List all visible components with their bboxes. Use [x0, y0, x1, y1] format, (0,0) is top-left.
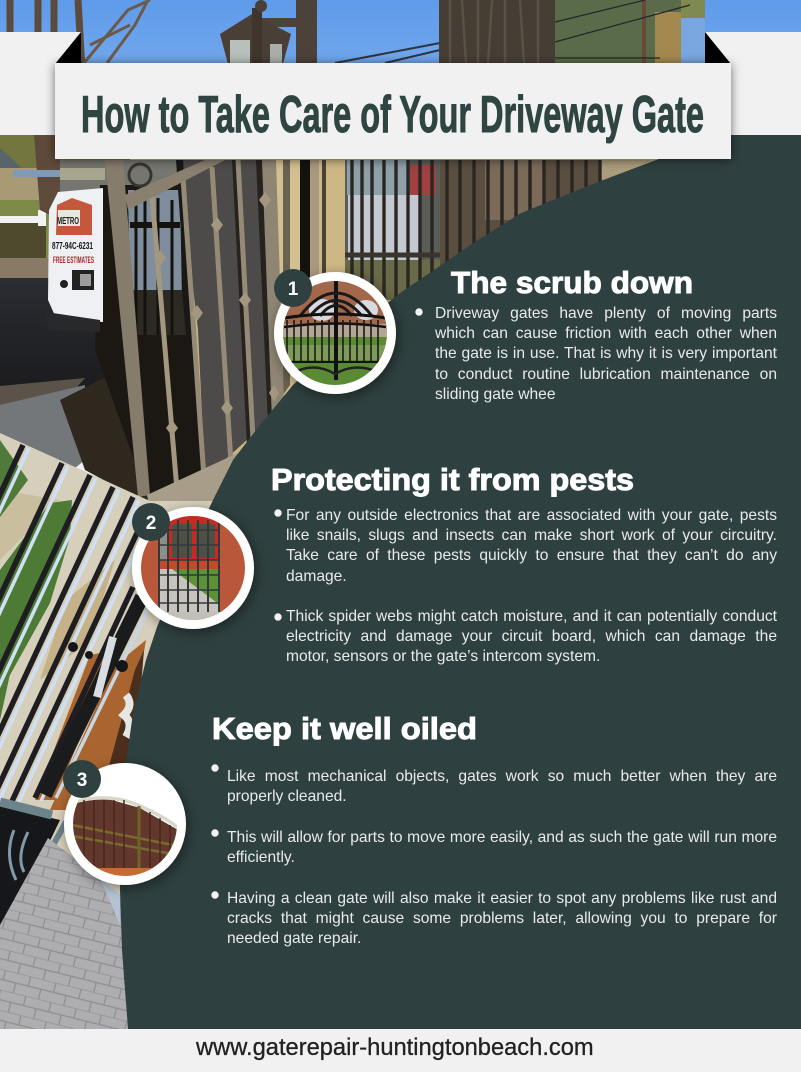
van	[46, 188, 103, 332]
ribbon ends	[0, 32, 801, 135]
text: scrub down paragraph: the gate is in use. That is why it is very important	[435, 345, 777, 362]
pickets	[352, 160, 600, 300]
title banner	[55, 63, 731, 159]
text: oil paragraph two: efficiently.	[227, 849, 295, 866]
tree trunk	[439, 0, 555, 70]
gate lattice	[0, 806, 60, 925]
gate bars	[0, 444, 140, 802]
text: scrub down paragraph: sliding gate whee	[435, 386, 556, 403]
icon: street lamp	[220, 0, 317, 64]
text: oil paragraph three: Having a clean gate will also make it easier to spot any problems like rust and	[227, 890, 777, 907]
main post and brace	[105, 160, 150, 497]
van: FREE ESTIMATES	[53, 255, 94, 265]
text: oil paragraph three: needed gate repair.	[227, 930, 361, 947]
footer website address: www.gaterepair-huntingtonbeach.com	[196, 1035, 594, 1061]
wrought bars	[130, 222, 180, 228]
number badge 1: 1	[288, 279, 299, 300]
road and sidewalk	[0, 278, 120, 388]
photo: fence and work van	[0, 135, 801, 510]
number badge 2	[132, 503, 170, 541]
heading: protecting it from pests: Protecting it from pests	[271, 462, 634, 497]
green hedge	[0, 500, 72, 693]
text: oil paragraph one	[227, 768, 777, 805]
text: pests paragraph two: Thick spider webs might catch moisture, and it can potentially conduct	[286, 608, 777, 625]
image circle 3: wooden gate	[64, 763, 186, 885]
number badge 1	[274, 269, 312, 307]
photo: angled gate close-up	[0, 433, 212, 1029]
text: scrub down paragraph: to conduct routine lubrication maintenance on	[435, 366, 777, 383]
text: oil paragraph one: Like most mechanical objects, gates work so much better when they are	[227, 768, 777, 785]
text: oil paragraph two: This will allow for parts to move more easily, and as such the gate will run more	[227, 829, 777, 846]
text: pests paragraph one: damage.	[286, 568, 347, 585]
text: scrub down paragraph: Driveway gates have plenty of moving parts	[435, 305, 777, 322]
image circle 2: brick wall gate	[132, 507, 254, 629]
heading: keep it well oiled: Keep it well oiled	[212, 711, 477, 746]
text: oil paragraph one: properly cleaned.	[227, 788, 347, 805]
left yard	[0, 135, 130, 215]
dark fence panels	[178, 160, 280, 478]
van: 877-94C-6231	[52, 241, 93, 252]
stucco	[275, 160, 300, 395]
view through fence	[345, 160, 440, 300]
text: pests paragraph one: Take care of these pests quickly to ensure that they can’t do any	[286, 547, 777, 564]
wood door panels	[35, 653, 104, 800]
text: pests paragraph two: electricity and damage your circuit board, which can damage the	[286, 628, 777, 645]
photo: sky and street lamp strip	[0, 0, 801, 140]
text: oil paragraph three	[227, 890, 777, 947]
number badge 2: 2	[146, 513, 156, 534]
van: METRO	[57, 216, 79, 227]
text: pests paragraph two	[286, 608, 777, 665]
text: scrub down paragraph: which can cause friction with each other when	[435, 325, 777, 342]
text: pests paragraph two: motor, sensors or the gate’s intercom system.	[286, 648, 600, 665]
number badge 3: 3	[77, 770, 87, 791]
finials	[154, 192, 279, 436]
text: oil paragraph two	[227, 829, 777, 866]
text: pests paragraph one: like snails, slugs and insects can make short work of your circuitry.	[286, 527, 777, 544]
text: pests paragraph one	[286, 507, 777, 585]
text: oil paragraph three: cracks that might cause some problems later, allowing you to prepare for	[227, 910, 777, 927]
number badge 3	[63, 760, 101, 798]
image circle 1: ornate gate	[274, 272, 396, 394]
distant trees	[555, 0, 705, 70]
dark foliage behind fence	[95, 185, 205, 505]
text: pests paragraph one: For any outside electronics that are associated with your gate, pests	[286, 507, 777, 524]
fence base wall	[147, 452, 240, 510]
bullets: section markers	[211, 308, 423, 899]
footer strip	[0, 1029, 801, 1072]
text: scrub down paragraph	[435, 305, 777, 403]
panel: dark curved background	[120, 135, 801, 1029]
heading: the scrub down: The scrub down	[451, 265, 693, 300]
